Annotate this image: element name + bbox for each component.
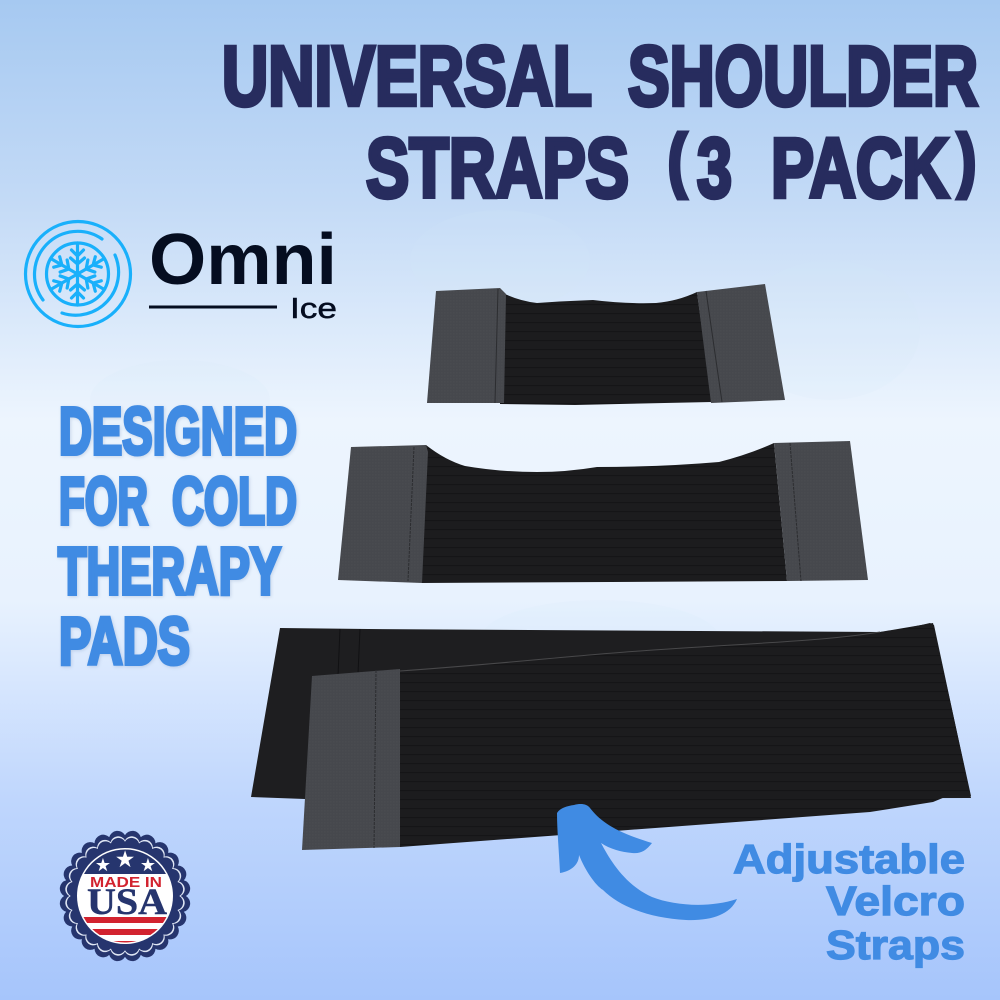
logo: Omni Ice: Ice: [290, 293, 337, 325]
logo: Omni Ice: [26, 220, 337, 326]
title: STRAPS: [366, 121, 629, 215]
side heading: designed for cold therapy pads: DESIGNED: [59, 394, 297, 469]
elastic centre: [500, 289, 712, 405]
elastic centre: [421, 443, 787, 583]
title: (: [669, 122, 685, 198]
callout: adjustable velcro straps: Velcro: [826, 878, 965, 924]
title: ): [959, 122, 975, 198]
side heading: designed for cold therapy pads: PADS: [59, 604, 190, 679]
side heading: designed for cold therapy pads: FOR: [59, 464, 148, 539]
callout: adjustable velcro straps: Adjustable: [733, 836, 965, 882]
navy cap and stripes: [84, 850, 166, 942]
stars: ★: [115, 847, 135, 873]
back layer: [251, 623, 971, 799]
icon: snowflake rings: [26, 222, 130, 326]
stars: ★: [140, 855, 156, 876]
title: UNIVERSAL: [222, 29, 592, 123]
stitching: [338, 629, 360, 676]
stars: [95, 847, 156, 876]
right velcro tab: [697, 284, 785, 403]
badge: made in USA: USA: [87, 882, 167, 923]
callout: adjustable velcro straps: Straps: [826, 922, 965, 968]
badge text: MADE IN: [90, 875, 162, 891]
scalloped edge: [60, 831, 190, 961]
callout: adjustable velcro straps: [733, 836, 965, 968]
side heading: designed for cold therapy pads: [58, 394, 297, 679]
right velcro tab: [774, 441, 868, 581]
front elastic: [400, 623, 971, 847]
title: [222, 29, 978, 215]
medium strap: [338, 441, 868, 583]
stars: ★: [95, 855, 111, 876]
arrow: [557, 804, 737, 920]
long strap with velcro: [251, 623, 971, 850]
left velcro tab: [427, 288, 506, 403]
velcro tab: [302, 669, 400, 850]
left velcro tab: [338, 445, 428, 583]
logo wordmark: Omni: [149, 220, 337, 300]
side heading: designed for cold therapy pads: THERAPY: [58, 534, 281, 609]
side heading: designed for cold therapy pads: COLD: [172, 464, 297, 539]
faint snowflake background pattern: [90, 210, 920, 680]
small strap: [427, 284, 785, 405]
title: PACK: [771, 121, 949, 215]
title: 3: [697, 121, 732, 215]
badge: made in USA: [60, 831, 190, 961]
fold line: [400, 632, 880, 671]
